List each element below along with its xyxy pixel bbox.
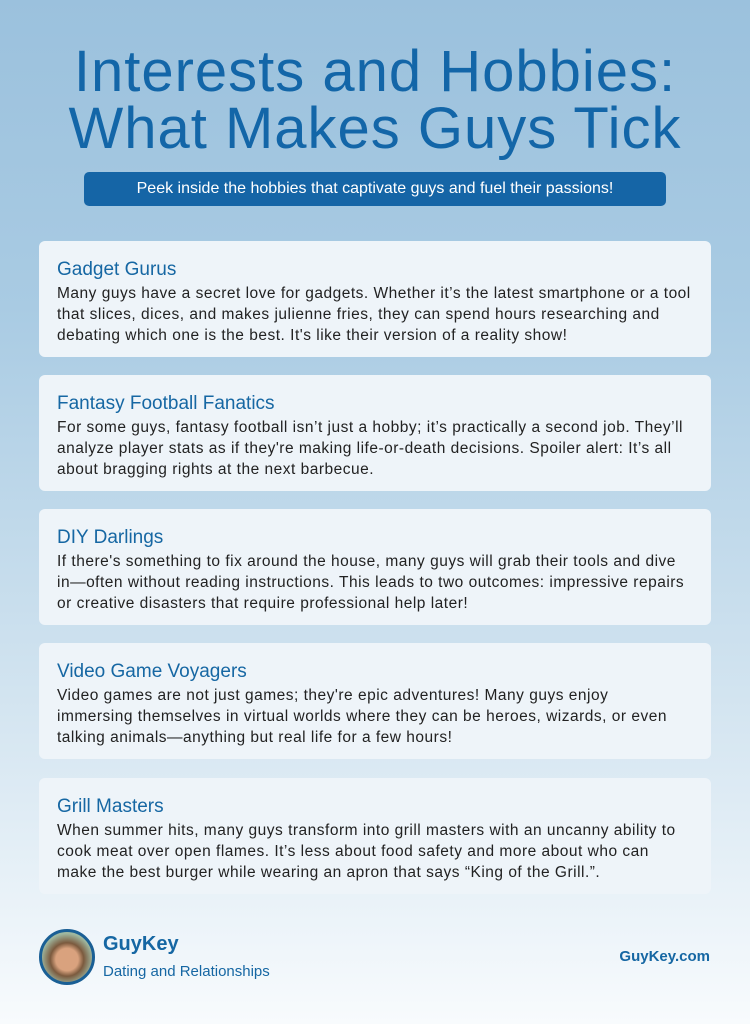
panel: fantasy football: analyze player stats as if they're making life-or-death decisions. Spoiler alert: It’s all [57, 440, 672, 457]
panel: grill: Grill Masters [57, 796, 164, 817]
panel: grill: make the best burger while wearing an apron that says “King of the Grill.”. [57, 864, 600, 881]
title: Interests and Hobbies: [74, 39, 676, 104]
subtitle pill [84, 172, 666, 206]
panel: video games: talking animals—anything but real life for a few hours! [57, 729, 452, 746]
website: GuyKey.com [619, 948, 710, 965]
panel: gadget gurus: Many guys have a secret love for gadgets. Whether it’s the latest smartphone or a tool [57, 285, 691, 302]
brand name: GuyKey [103, 933, 179, 955]
panel: fantasy football: about bragging rights at the next barbecue. [57, 461, 374, 478]
panel: DIY [39, 509, 711, 625]
panel: grill: When summer hits, many guys transform into grill masters with an uncanny ability to [57, 822, 676, 839]
panel: video games: immersing themselves in virtual worlds where they can be heroes, wizards, or even [57, 708, 667, 725]
title [68, 39, 682, 161]
panel: DIY: DIY Darlings [57, 527, 163, 548]
brand tagline: Dating and Relationships [103, 963, 270, 980]
panel: gadget gurus: debating which one is the best. It's like their version of a reality show! [57, 327, 567, 344]
panel: fantasy football: Fantasy Football Fanatics [57, 393, 275, 414]
panel: video games [39, 643, 711, 759]
panel: gadget gurus: that slices, dices, and makes julienne fries, they can spend hours researching and [57, 306, 660, 323]
title: What Makes Guys Tick [68, 96, 682, 161]
panel: DIY: If there's something to fix around the house, many guys will grab their tools and dive [57, 553, 676, 570]
subtitle pill: Peek inside the hobbies that captivate guys and fuel their passions! [137, 180, 613, 197]
panel: fantasy football: For some guys, fantasy football isn’t just a hobby; it’s practically a second job. They’ll [57, 419, 683, 436]
panel: grill [39, 778, 711, 894]
panel: gadget gurus: Gadget Gurus [57, 259, 176, 280]
panel: DIY: in—often without reading instructions. This leads to two outcomes: impressive repairs [57, 574, 684, 591]
icon: avatar [39, 929, 95, 985]
panel: video games: Video games are not just games; they're epic adventures! Many guys enjoy [57, 687, 608, 704]
panel: video games: Video Game Voyagers [57, 661, 247, 682]
panel: gadget gurus [39, 241, 711, 357]
panel: grill: cook meat over open flames. It’s less about food safety and more about who can [57, 843, 649, 860]
panel: fantasy football [39, 375, 711, 491]
panel: DIY: or creative disasters that require professional help later! [57, 595, 468, 612]
